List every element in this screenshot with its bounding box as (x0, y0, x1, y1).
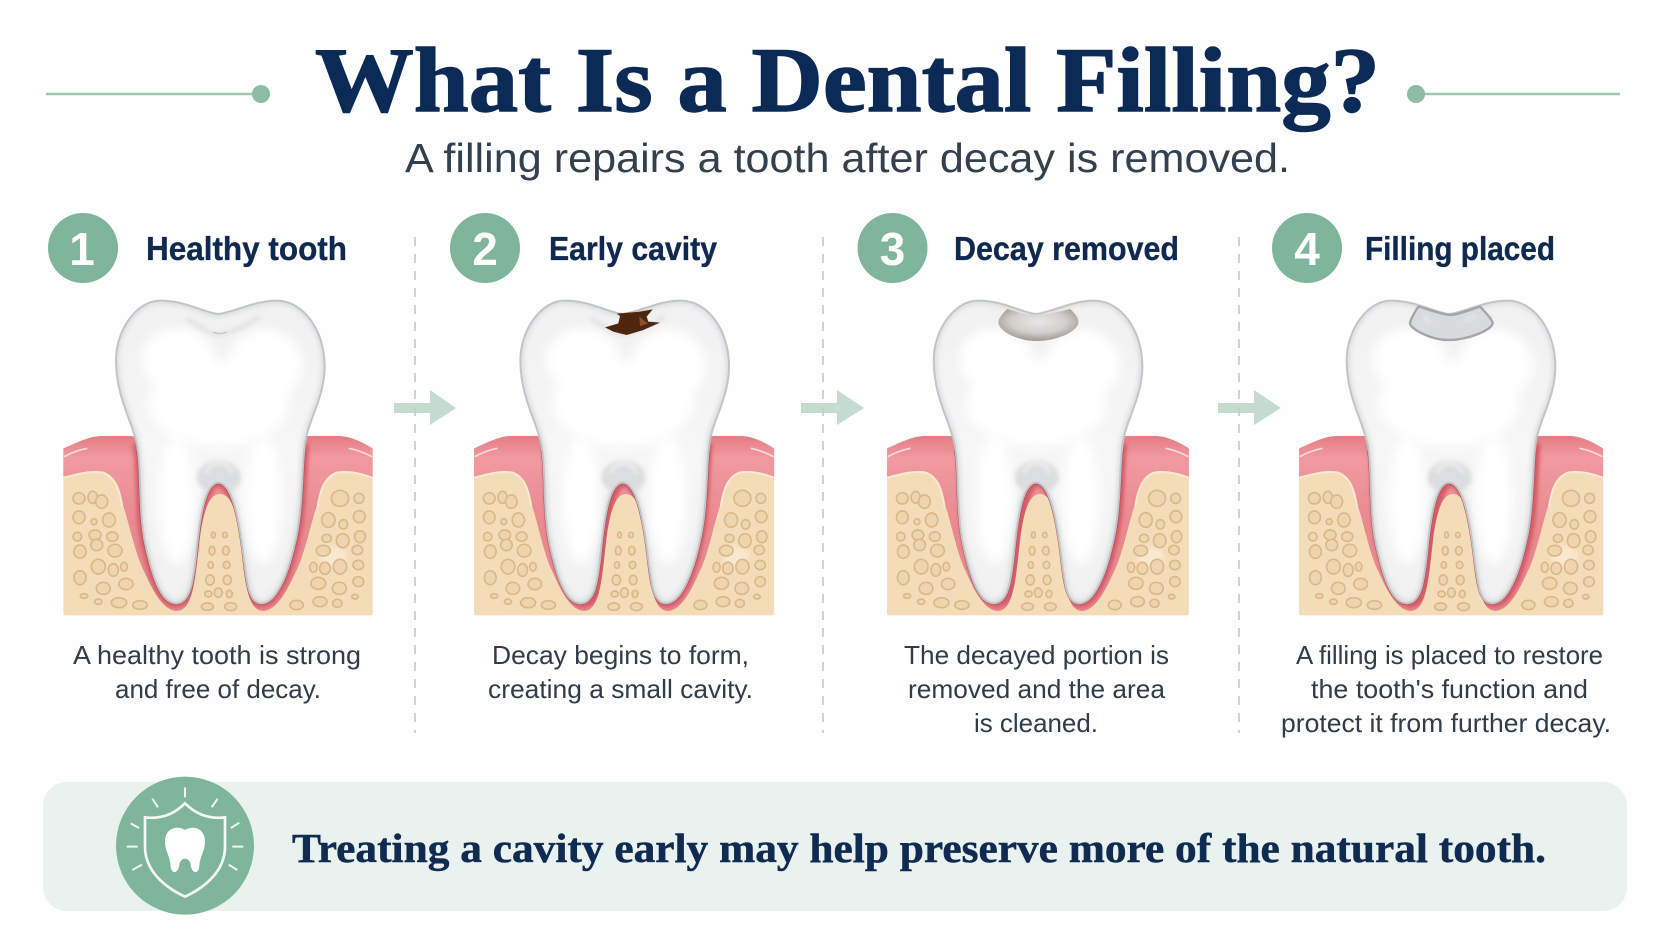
icon: shield with tooth (116, 777, 254, 915)
step 4 badge (1272, 213, 1342, 283)
cleaned cavity (998, 309, 1078, 341)
subtitle: A filling repairs a tooth after decay is removed. (405, 135, 1290, 181)
left title ornament (46, 85, 270, 103)
step 4 description: protect it from further decay. (1281, 708, 1611, 738)
title: What Is a Dental Filling? (315, 29, 1380, 131)
illustration: tooth with decay removed (887, 301, 1189, 615)
banner message: Treating a cavity early may help preserve more of the natural tooth. (292, 825, 1546, 871)
illustration: tooth with early cavity (474, 301, 774, 615)
step 2 badge: 2 (472, 223, 498, 275)
illustration: tooth with filling (1299, 301, 1603, 615)
step 1 badge (48, 213, 118, 283)
step 3 description: removed and the area (908, 674, 1166, 704)
step 4 description: A filling is placed to restore (1296, 640, 1603, 670)
panel: step 1 healthy tooth (48, 213, 373, 704)
arrow 2 to 3 (801, 390, 864, 425)
step 1 heading: Healthy tooth (146, 230, 347, 267)
filling (1410, 307, 1493, 340)
callout banner (43, 777, 1627, 915)
step 2 badge (450, 213, 520, 283)
panel: step 3 decay removed (858, 213, 1189, 738)
cavity (605, 309, 660, 335)
step 3 badge (858, 213, 928, 283)
arrow 3 to 4 (1218, 390, 1281, 425)
panel: step 4 filling placed (1272, 213, 1611, 738)
banner background (43, 782, 1627, 911)
step 4 heading: Filling placed (1365, 230, 1555, 267)
step 1 description: A healthy tooth is strong (73, 640, 361, 670)
step 2 description: Decay begins to form, (492, 640, 749, 670)
right title ornament (1407, 85, 1620, 103)
step 1 badge: 1 (69, 223, 95, 275)
step 2 heading: Early cavity (549, 230, 718, 267)
step 3 description: The decayed portion is (904, 640, 1169, 670)
step 2 description: creating a small cavity. (488, 674, 753, 704)
step 4 badge: 4 (1294, 223, 1320, 275)
arrow 1 to 2 (394, 390, 456, 425)
step 3 badge: 3 (880, 223, 905, 275)
panel: step 2 early cavity (450, 213, 774, 704)
step 1 description: and free of decay. (115, 674, 321, 704)
step 3 heading: Decay removed (954, 230, 1179, 267)
step 4 description: the tooth's function and (1311, 674, 1588, 704)
step 3 description: is cleaned. (974, 708, 1098, 738)
illustration: healthy tooth in gum and bone (63, 301, 373, 615)
